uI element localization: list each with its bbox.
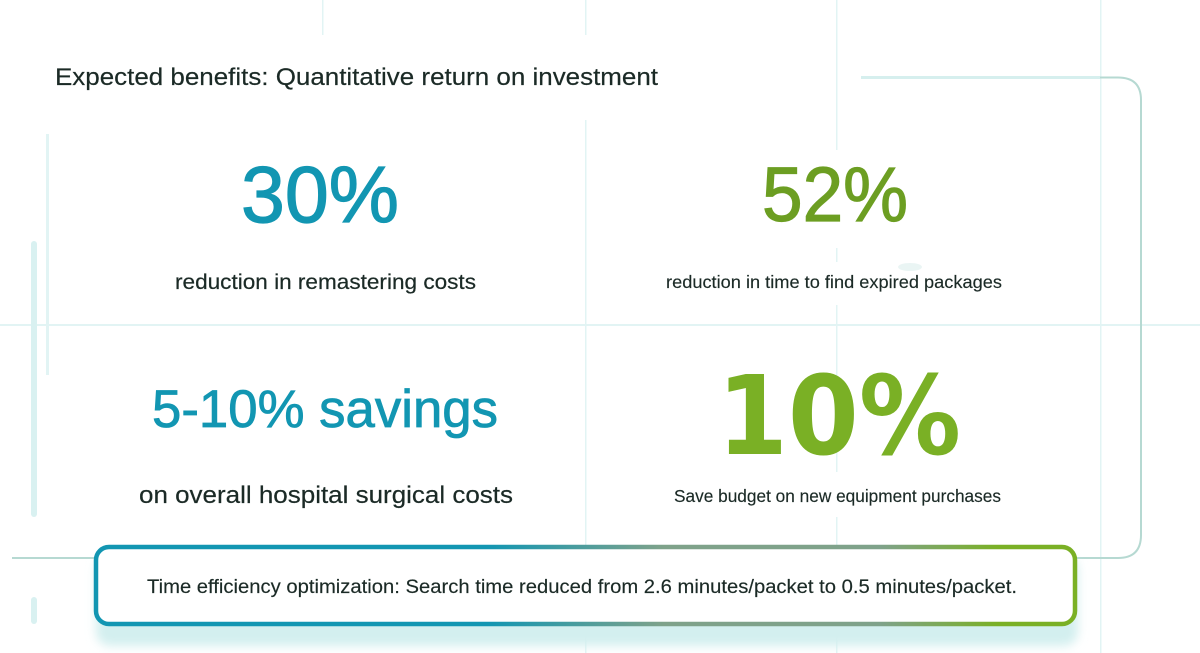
label: remastering costs: reduction in remastering costs	[175, 271, 476, 294]
stat: 30%: 30%	[241, 150, 399, 239]
label: surgical costs: on overall hospital surgical costs	[139, 482, 513, 509]
label: equipment purchases: Save budget on new equipment purchases	[674, 486, 1001, 506]
panel: equipment budget	[674, 352, 1001, 506]
label: expired packages: reduction in time to find expired packages	[666, 272, 1002, 292]
stat: 10%: 10%	[717, 352, 961, 480]
artifact smudge	[898, 263, 922, 271]
callout: time efficiency	[96, 547, 1078, 646]
panel: hospital surgical costs	[139, 380, 513, 509]
stat: 52%: 52%	[762, 152, 908, 238]
accent bar: left long	[31, 241, 37, 517]
panel: time to find expired packages	[666, 152, 1002, 292]
callout text: Time efficiency optimization: Search time reduced from 2.6 minutes/packet to 0.5 minutes/packet.	[147, 577, 1017, 598]
outer frame line	[12, 78, 1141, 558]
accent bar: left short	[31, 597, 37, 624]
panel: remastering costs	[175, 150, 476, 294]
heading: Expected benefits: Quantitative return on investment	[55, 64, 658, 91]
stat: 5-10% savings: 5-10% savings	[152, 380, 498, 439]
